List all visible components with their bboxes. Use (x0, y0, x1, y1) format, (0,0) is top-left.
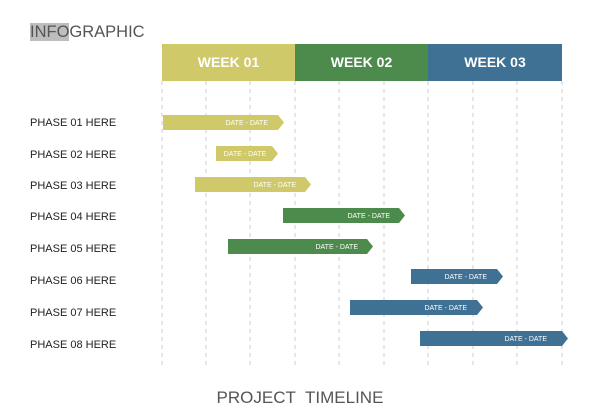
phase labels (30, 117, 116, 351)
week header: week 01: WEEK 01 (198, 54, 259, 70)
gantt bars: DATE - DATE (504, 336, 547, 343)
phase labels: PHASE 03 HERE (30, 180, 116, 192)
week header: week 02: WEEK 02 (331, 54, 392, 70)
gantt bars: DATE - DATE (225, 120, 268, 127)
phase labels: PHASE 05 HERE (30, 243, 116, 255)
gantt bars: DATE - DATE (424, 305, 467, 312)
phase labels: PHASE 02 HERE (30, 149, 116, 161)
gantt bars: DATE - DATE (347, 213, 390, 220)
phase labels: PHASE 01 HERE (30, 117, 116, 129)
phase labels: PHASE 08 HERE (30, 339, 116, 351)
week header: week 03 (428, 44, 562, 81)
gantt bars: DATE - DATE (253, 182, 296, 189)
title: INFOGRAPHIC (30, 23, 145, 41)
gantt bars: DATE - DATE (224, 151, 267, 158)
footer title: PROJECT TIMELINE (217, 388, 383, 407)
phase labels: PHASE 07 HERE (30, 307, 116, 319)
week header: week 02 (295, 44, 428, 81)
gantt bars: DATE - DATE (444, 274, 487, 281)
week header: week 01 (162, 44, 295, 81)
week header: week 03: WEEK 03 (464, 54, 526, 70)
phase labels: PHASE 04 HERE (30, 211, 116, 223)
phase labels: PHASE 06 HERE (30, 275, 116, 287)
gantt bars: DATE - DATE (315, 244, 358, 251)
